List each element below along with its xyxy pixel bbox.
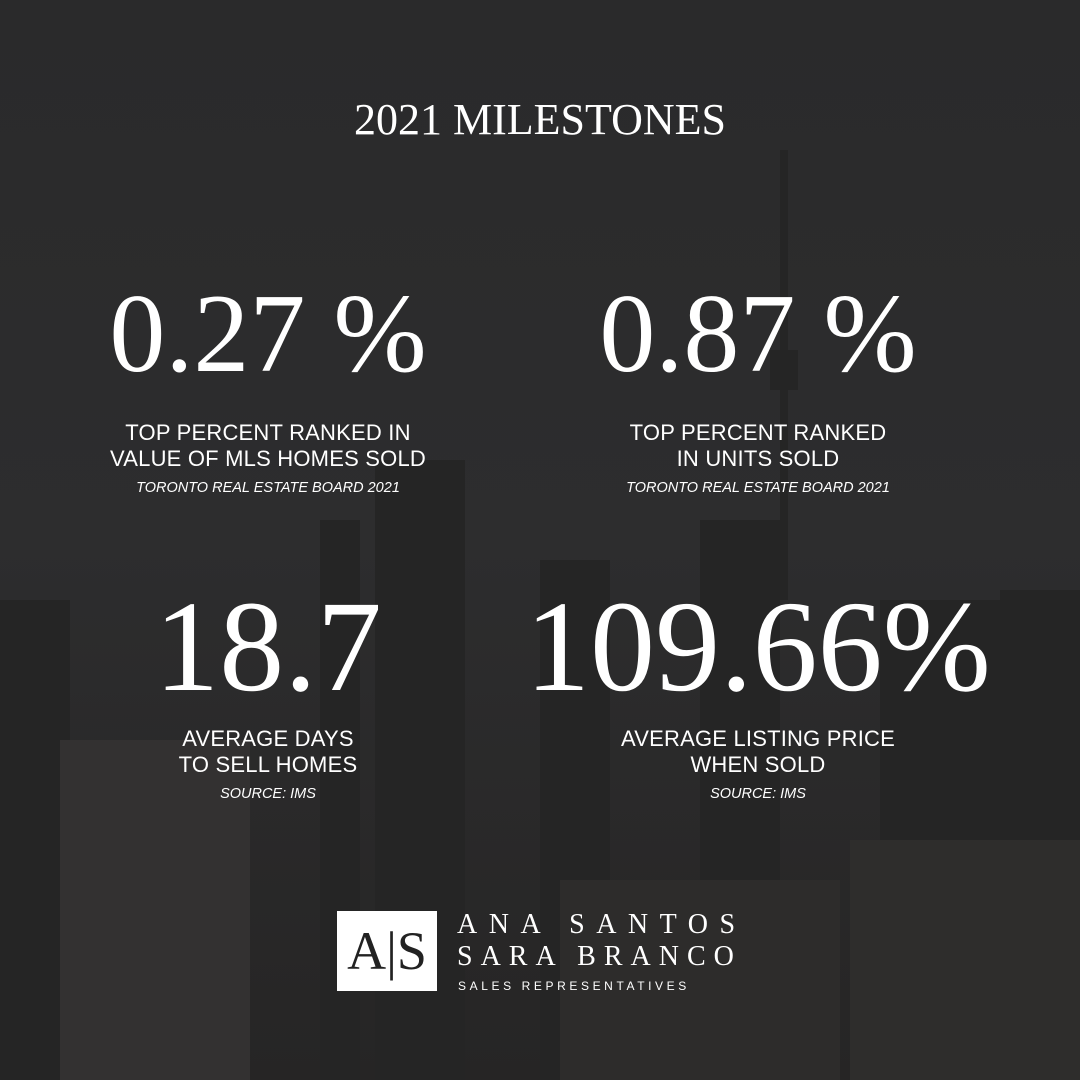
- label: WHEN SOLD: [690, 752, 826, 777]
- stat: 0.87%: TORONTO REAL ESTATE BOARD 2021: [626, 480, 890, 496]
- logo box: [337, 911, 437, 991]
- label: AVERAGE LISTING PRICE: [621, 726, 895, 751]
- stat: 109.66%: [525, 575, 991, 802]
- label: [179, 726, 357, 777]
- stat: 109.66%: SOURCE: IMS: [710, 786, 806, 802]
- title: 2021 MILESTONES: [354, 95, 726, 144]
- label: [621, 726, 895, 777]
- label: TO SELL HOMES: [179, 752, 357, 777]
- logo: [337, 909, 747, 993]
- label: [110, 420, 426, 471]
- stat: 109.66%: 109.66%: [525, 575, 991, 719]
- logo: SALES REPRESENTATIVES: [458, 979, 690, 993]
- stat: 0.87%: [599, 272, 917, 496]
- label: [630, 420, 886, 471]
- stat: 0.27%: [109, 272, 427, 496]
- label: TOP PERCENT RANKED IN: [125, 420, 411, 445]
- label: AVERAGE DAYS: [182, 726, 354, 751]
- stat: 0.27%: TORONTO REAL ESTATE BOARD 2021: [136, 480, 400, 496]
- label: IN UNITS SOLD: [677, 446, 839, 471]
- stat: 0.87%: 0.87 %: [599, 272, 917, 396]
- logo names: [457, 909, 747, 972]
- label: VALUE OF MLS HOMES SOLD: [110, 446, 426, 471]
- stat: 18.7: SOURCE: IMS: [220, 786, 316, 802]
- logo box: A|S: [347, 921, 427, 981]
- stat: 0.27%: 0.27 %: [109, 272, 427, 396]
- stat: 18.7: 18.7: [154, 575, 382, 719]
- logo names: ANA SANTOS: [457, 909, 747, 940]
- logo names: SARA BRANCO: [457, 941, 742, 972]
- stat: 18.7: [154, 575, 382, 802]
- label: TOP PERCENT RANKED: [630, 420, 886, 445]
